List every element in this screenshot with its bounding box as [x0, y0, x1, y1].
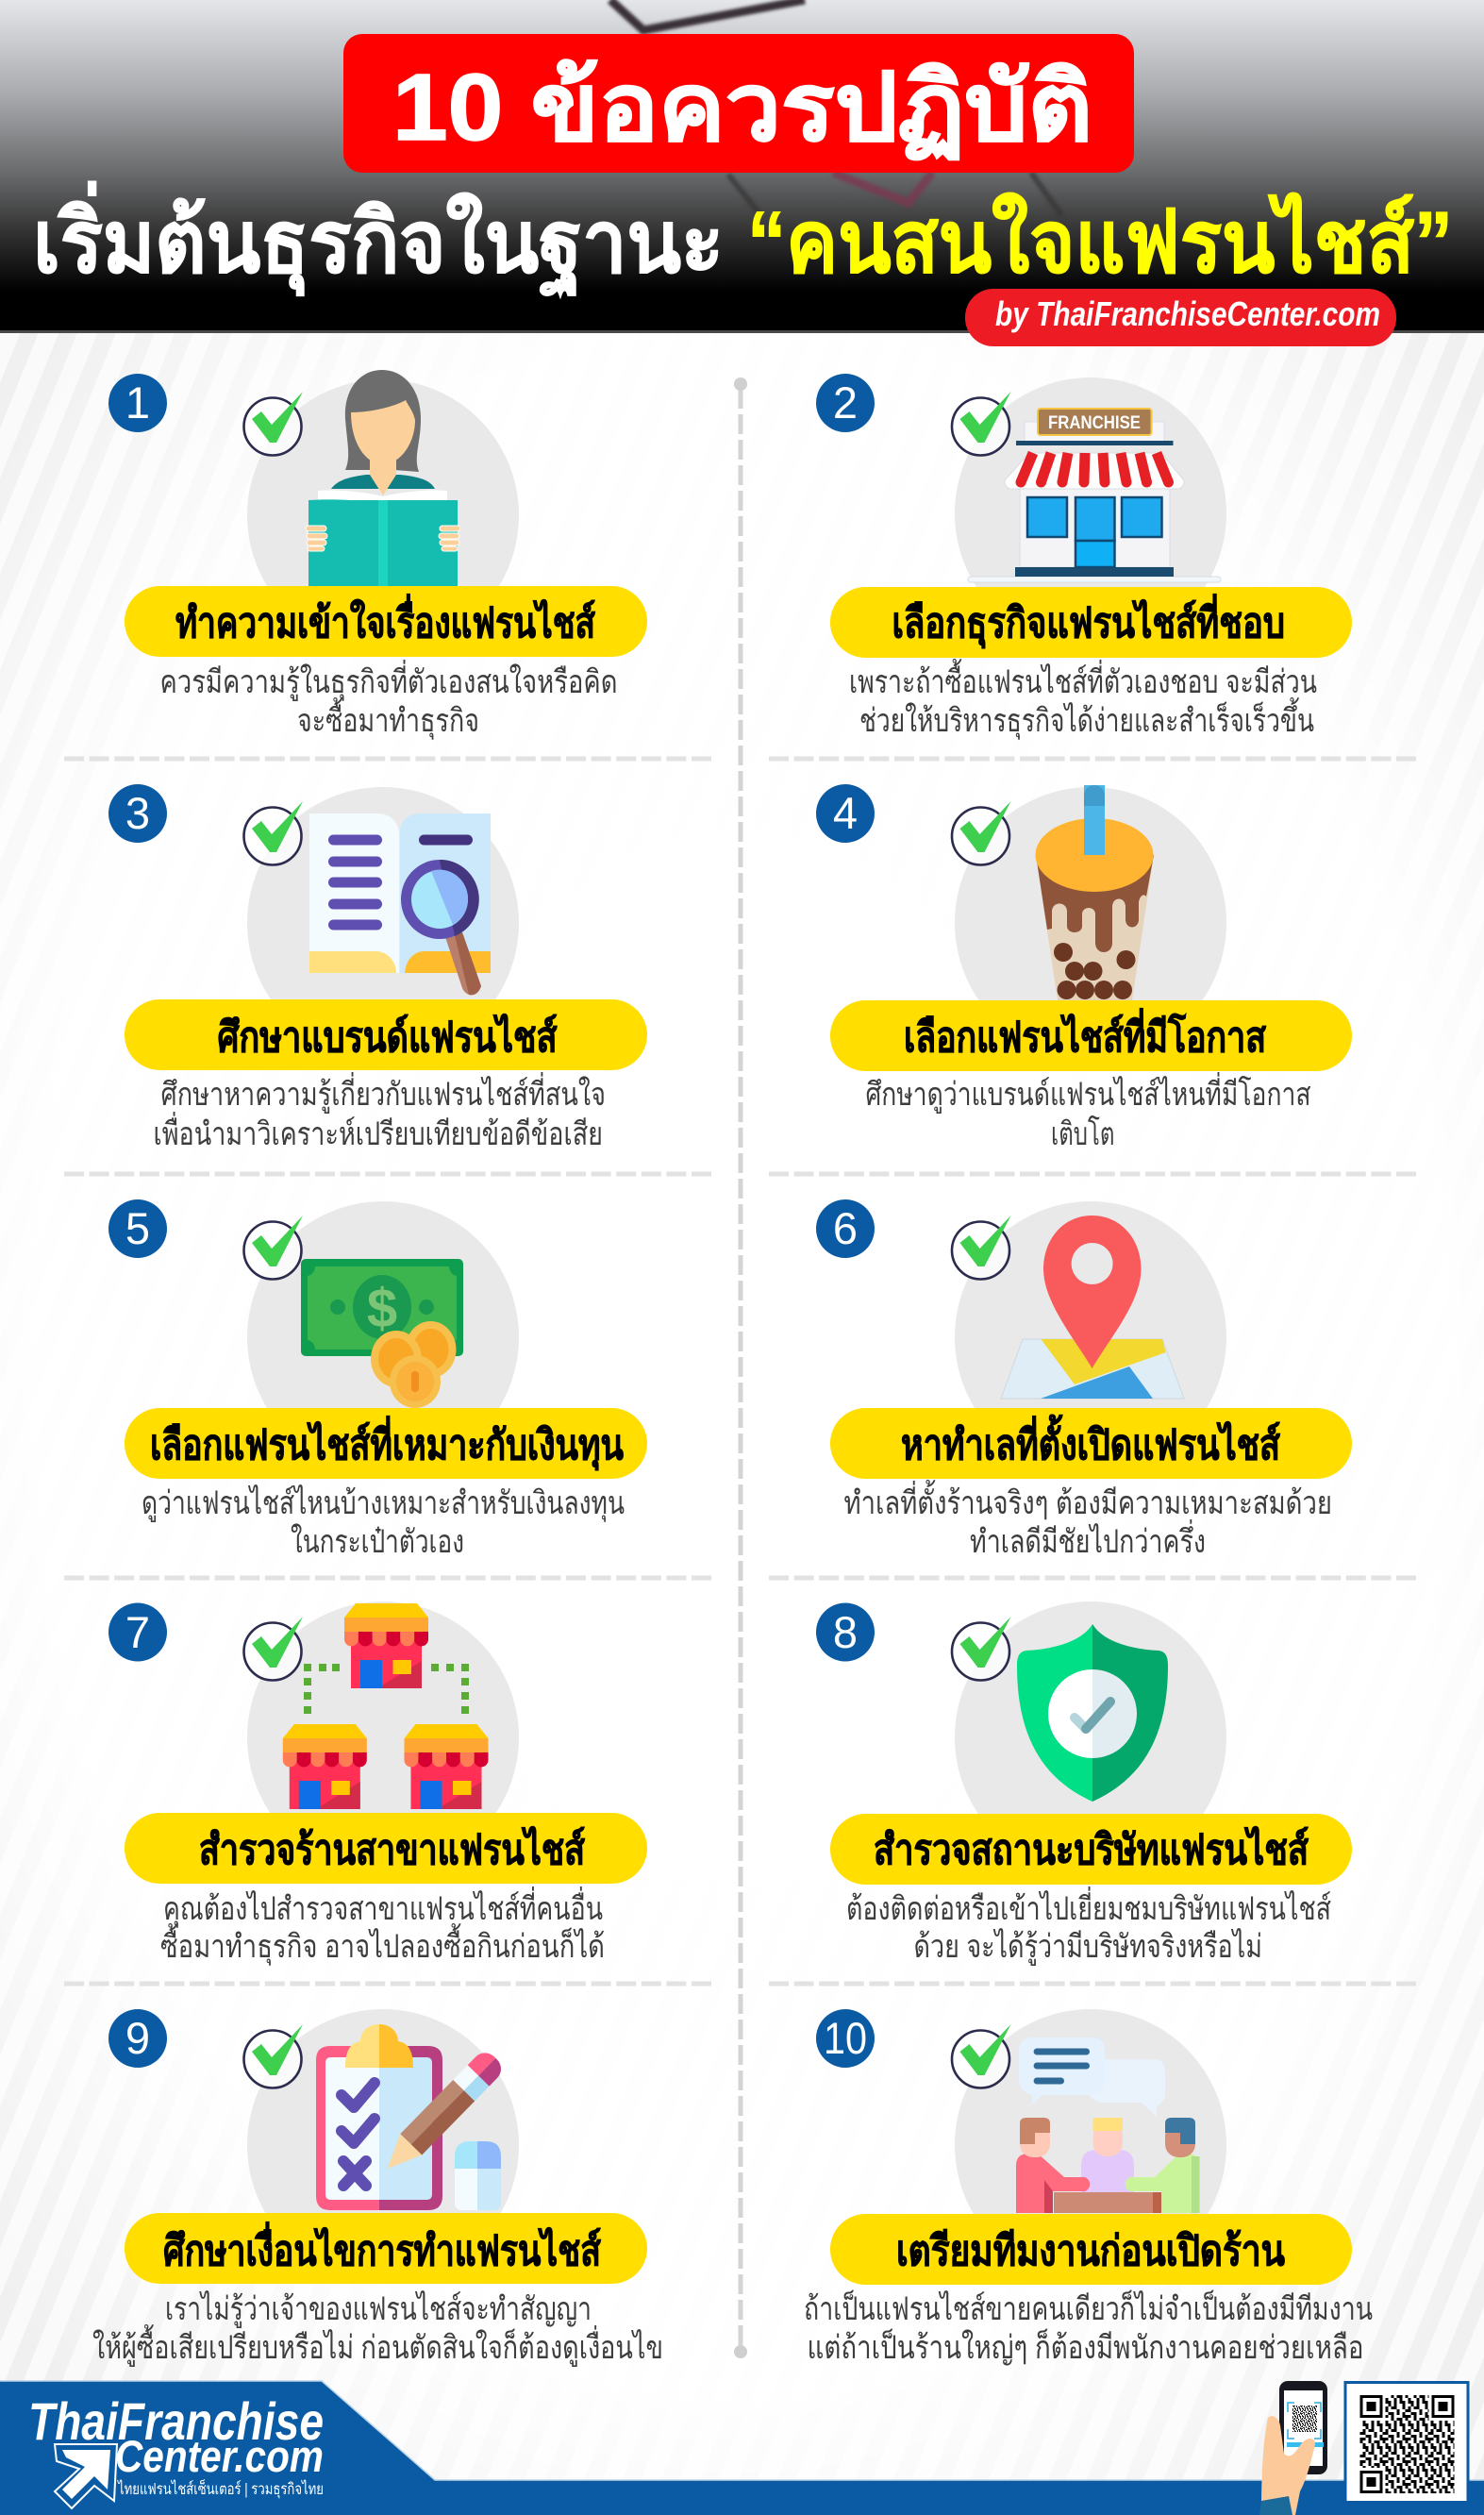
- description 3: [153, 1072, 606, 1152]
- heading: white part: เริ่มต้นธุรกิจในฐานะ: [33, 180, 724, 299]
- icon: check mark 10: [952, 2024, 1011, 2087]
- title pill 3: [125, 999, 647, 1070]
- icon: map location pin: [1001, 1216, 1184, 1399]
- number badge 7: [108, 1602, 167, 1661]
- number badge 3: 3: [125, 788, 150, 838]
- icon: check mark 7: [243, 1617, 303, 1680]
- description 5: [142, 1484, 625, 1560]
- icon: check mark 3: [243, 801, 303, 864]
- icon: franchise storefront: [968, 409, 1221, 582]
- description 5: ดูว่าแฟรนไชส์ไหนบ้างเหมาะสำหรับเงินลงทุน: [142, 1484, 625, 1522]
- number badge 3: [108, 784, 167, 843]
- description 6: ทำเลดีมีชัยไปกว่าครึ่ง: [970, 1519, 1206, 1560]
- description 8: ด้วย จะได้รู้ว่ามีบริษัทจริงหรือไม่: [913, 1928, 1262, 1966]
- description 8: [846, 1886, 1331, 1966]
- title pill 9: [125, 2213, 647, 2284]
- description 10: [804, 2289, 1373, 2366]
- icon: team meeting with speech bubbles: [1016, 2037, 1200, 2213]
- description 4: ศึกษาดูว่าแบรนด์แฟรนไชส์ไหนที่มีโอกาส: [866, 1072, 1311, 1114]
- title pill 4: เลือกแฟรนไชส์ที่มีโอกาส: [904, 1008, 1266, 1061]
- description 3: เพื่อนำมาวิเคราะห์เปรียบเทียบข้อดีข้อเสีย: [153, 1112, 603, 1152]
- title pill 8: สำรวจสถานะบริษัทแฟรนไชส์: [874, 1825, 1309, 1873]
- title pill 4: [830, 1000, 1352, 1071]
- description 9: ให้ผู้ซื้อเสียเปรียบหรือไม่ ก่อนตัดสินใจก็ต้องดูเงื่อนไข: [92, 2324, 663, 2367]
- description 8: ต้องติดต่อหรือเข้าไปเยี่ยมชมบริษัทแฟรนไชส์: [846, 1886, 1331, 1927]
- icon: check mark 5: [243, 1216, 303, 1280]
- description 7: คุณต้องไปสำรวจสาขาแฟรนไชส์ที่คนอื่น: [163, 1886, 603, 1928]
- title pill 5: เลือกแฟรนไชส์ที่เหมาะกับเงินทุน: [150, 1416, 624, 1471]
- number badge 2: [816, 374, 875, 432]
- number badge 7: 7: [125, 1607, 150, 1657]
- item 4: [816, 784, 1352, 1152]
- description 2: ช่วยให้บริหารธุรกิจได้ง่ายและสำเร็จเร็วขึ้น: [859, 697, 1314, 740]
- title pill 6: หาทำเลที่ตั้งเปิดแฟรนไชส์: [901, 1414, 1280, 1468]
- center vertical dashed divider: [734, 377, 747, 2358]
- title pill 7: สำรวจร้านสาขาแฟรนไชส์: [199, 1825, 585, 1873]
- icon: woman reading a book: [306, 370, 460, 586]
- icon backdrop 7: [247, 1601, 519, 1873]
- description 7: [160, 1886, 605, 1966]
- icon: logo arrow: [55, 2444, 117, 2508]
- item 1: [108, 370, 647, 740]
- icon: check mark 2: [952, 392, 1011, 455]
- title pill 5: [125, 1408, 647, 1479]
- number badge 5: 5: [125, 1203, 150, 1253]
- title pill 1: ทำความเข้าใจเรื่องแฟรนไชส์: [175, 594, 595, 646]
- description 3: ศึกษาหาความรู้เกี่ยวกับแฟรนไชส์ที่สนใจ: [160, 1072, 606, 1114]
- title pill 10: [830, 2214, 1352, 2285]
- icon: check mark 6: [952, 1216, 1011, 1280]
- icon backdrop 1: [247, 379, 519, 651]
- description 2: [849, 659, 1317, 740]
- number badge 1: [108, 374, 167, 432]
- description 10: แต่ถ้าเป็นร้านใหญ่ๆ ก็ต้องมีพนักงานคอยช่วยเหลือ: [808, 2328, 1364, 2366]
- title pill 2: [830, 587, 1352, 658]
- footer logo: [28, 2391, 324, 2508]
- icon: check mark 1: [243, 392, 303, 455]
- title pill 2: เลือกธุรกิจแฟรนไชส์ที่ชอบ: [892, 594, 1285, 649]
- item 9: [92, 2009, 663, 2367]
- number badge 1: 1: [125, 377, 150, 428]
- description 2: เพราะถ้าซื้อแฟรนไชส์ที่ตัวเองชอบ จะมีส่วน: [849, 659, 1317, 700]
- title pill 10: เตรียมทีมงานก่อนเปิดร้าน: [896, 2228, 1285, 2274]
- item 8: [816, 1601, 1352, 1966]
- QR code card: [1345, 2382, 1468, 2503]
- description 6: ทำเลที่ตั้งร้านจริงๆ ต้องมีความเหมาะสมด้วย: [843, 1480, 1332, 1521]
- description 4: เติบโต: [1051, 1115, 1115, 1152]
- item 3: [108, 784, 647, 1152]
- description 9: [92, 2290, 663, 2367]
- icon: hand holding phone: [1259, 2381, 1327, 2515]
- number badge 9: 9: [125, 2013, 150, 2063]
- title pill 9: ศึกษาเงื่อนไขการทำแฟรนไชส์: [163, 2222, 601, 2274]
- number badge 2: 2: [833, 377, 858, 428]
- icon backdrop 2: [955, 377, 1226, 649]
- icon: boba tea cup: [1036, 785, 1154, 1000]
- title badge: 10 ข้อควรปฏิบัติ: 10 ข้อควรปฏิบัติ: [392, 55, 1092, 161]
- title pill 3: ศึกษาแบรนด์แฟรนไชส์: [217, 1013, 558, 1061]
- footer logo: Center.com: [115, 2431, 324, 2481]
- icon backdrop 6: [955, 1201, 1226, 1473]
- icon backdrop 8: [955, 1601, 1226, 1873]
- item 6: [816, 1199, 1352, 1560]
- item 5: [108, 1199, 647, 1560]
- number badge 5: [108, 1199, 167, 1258]
- icon backdrop 10: [955, 2009, 1226, 2281]
- description 6: [843, 1480, 1332, 1560]
- number badge 8: [816, 1602, 875, 1661]
- icon: banknote and coins: $: [367, 1278, 397, 1339]
- description 1: ควรมีความรู้ในธุรกิจที่ตัวเองสนใจหรือคิด: [160, 660, 617, 701]
- description 1: [160, 660, 617, 740]
- number badge 9: [108, 2009, 167, 2068]
- byline pill: [965, 289, 1396, 346]
- footer band: [0, 2381, 1484, 2515]
- icon backdrop 3: [247, 787, 519, 1059]
- icon: checklist clipboard and pencil: [316, 2024, 507, 2210]
- footer logo: ไทยแฟรนไชส์เซ็นเตอร์ | รวมธุรกิจไทย: [116, 2478, 324, 2499]
- description 5: ในกระเป๋าตัวเอง: [291, 1523, 464, 1560]
- number badge 8: 8: [833, 1607, 858, 1657]
- item 2: [816, 374, 1352, 740]
- title pill 6: [830, 1408, 1352, 1479]
- number badge 6: 6: [833, 1203, 858, 1253]
- byline pill: by ThaiFranchiseCenter.com: [995, 294, 1380, 333]
- icon: shield with check: [1017, 1624, 1168, 1802]
- number badge 6: [816, 1199, 875, 1258]
- icon backdrop 5: [247, 1201, 519, 1473]
- description 4: [866, 1072, 1311, 1152]
- title pill 1: [125, 586, 647, 657]
- icon: check mark 8: [952, 1617, 1011, 1680]
- icon backdrop 4: [955, 787, 1226, 1059]
- title badge: 10 ข้อควรปฏิบัติ: [343, 34, 1134, 173]
- footer logo: ThaiFranchise: [28, 2391, 324, 2451]
- description 1: จะซื้อมาทำธุรกิจ: [297, 697, 479, 740]
- header band: [0, 0, 1484, 333]
- title pill 8: [830, 1814, 1352, 1885]
- icon: branch shops network: [283, 1603, 489, 1809]
- number badge 4: [816, 784, 875, 843]
- number badge 10: 10: [824, 2013, 867, 2063]
- icon: open book with magnifier: [309, 813, 491, 995]
- icon: franchise storefront: FRANCHISE: [1048, 413, 1141, 433]
- item 7: [108, 1601, 647, 1966]
- item 10: [804, 2009, 1373, 2366]
- description 9: เราไม่รู้ว่าเจ้าของแฟรนไชส์จะทำสัญญา: [165, 2290, 592, 2328]
- icon: check mark 4: [952, 801, 1011, 864]
- icon: banknote and coins: [301, 1259, 463, 1408]
- icon: check mark 9: [243, 2024, 303, 2087]
- title pill 7: [125, 1813, 647, 1884]
- description 7: ซื้อมาทำธุรกิจ อาจไปลองซื้อกินก่อนก็ได้: [160, 1923, 605, 1966]
- icon backdrop 9: [247, 2009, 519, 2281]
- number badge 4: 4: [833, 788, 858, 838]
